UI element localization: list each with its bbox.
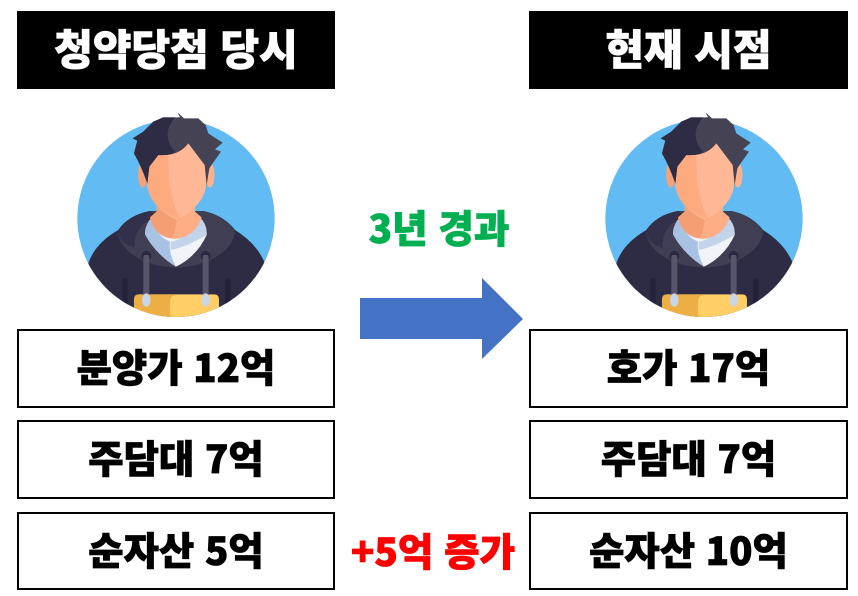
heading: at subscription win: 청약당첨 당시 [54,17,298,78]
icon: man avatar left [77,113,275,333]
box: sale price left: 분양가 12억 [77,338,275,394]
box: mortgage left [17,420,335,499]
heading: at subscription win [17,11,335,89]
heading: current point in time [529,11,848,89]
box: net assets left: 순자산 5억 [88,521,264,577]
arrow: time passing [360,278,523,359]
label: 3 years elapsed: 3년 경과 [369,199,509,255]
illustrations and arrow [77,112,803,359]
box: asking price right [529,329,848,408]
label: 5 eok increase: +5억 증가 [351,522,515,578]
heading: current point in time: 현재 시점 [605,17,772,78]
box: net assets right [529,512,848,590]
icon: man avatar right [605,113,803,333]
box: mortgage right: 주담대 7억 [601,429,776,485]
box: mortgage left: 주담대 7억 [88,429,264,485]
box: net assets left [17,512,335,590]
box: sale price left [17,329,335,408]
box: mortgage right [529,420,848,499]
box: net assets right: 순자산 10억 [589,521,788,577]
box: asking price right: 호가 17억 [607,338,770,394]
